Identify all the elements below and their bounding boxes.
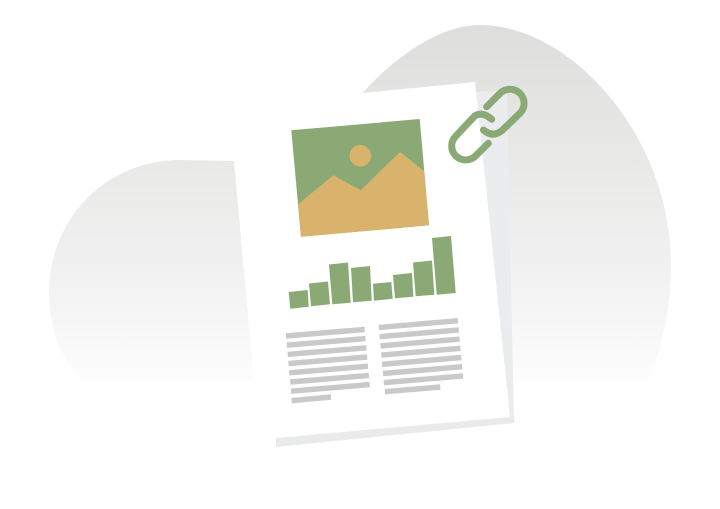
bar chart xyxy=(289,236,456,309)
background blob: right xyxy=(340,25,671,381)
text lines: left column xyxy=(286,329,370,401)
sun xyxy=(350,145,371,166)
icon: chain link xyxy=(452,89,524,160)
text lines: right column xyxy=(379,321,463,392)
mountains xyxy=(298,152,429,237)
picture background xyxy=(291,119,429,237)
background blob: left xyxy=(49,160,254,380)
page shadow: right sheet xyxy=(475,90,514,423)
picture placeholder xyxy=(291,119,429,237)
document page xyxy=(229,82,510,438)
page shadow: bottom sheet xyxy=(276,416,514,447)
